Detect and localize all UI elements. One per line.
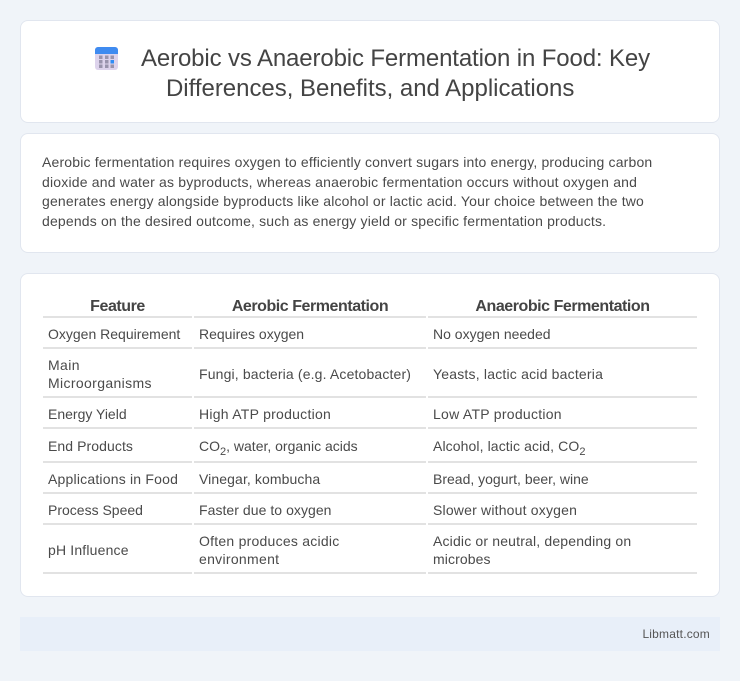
row: microorganisms: Microorganisms — [48, 375, 152, 391]
row: microorganisms: Main — [48, 357, 80, 373]
row: speed: Process Speed — [48, 502, 143, 518]
row: pH: pH Influence — [48, 542, 129, 558]
table: Faster due to oxygen — [199, 502, 332, 518]
table: Alcohol, lactic acid, CO2 — [433, 438, 586, 458]
panel: intro — [20, 133, 720, 253]
title: Aerobic vs Anaerobic Fermentation in Food: Key — [141, 45, 650, 72]
table: High ATP production — [199, 406, 331, 422]
intro text: depends on the desired outcome, such as energy yield or specific fermentation products. — [42, 212, 606, 228]
row: end products: End Products — [48, 438, 133, 454]
panel: comparison table — [20, 273, 720, 597]
row: applications: Applications in Food — [48, 471, 178, 487]
table: environment — [199, 551, 279, 567]
header: aerobic: Aerobic Fermentation — [232, 298, 388, 315]
title: Differences, Benefits, and Applications — [166, 75, 574, 102]
table: CO2, water, organic acids — [199, 438, 358, 458]
table: microbes — [433, 551, 491, 567]
table: Vinegar, kombucha — [199, 471, 320, 487]
table: Bread, yogurt, beer, wine — [433, 471, 589, 487]
table: Fungi, bacteria (e.g. Acetobacter) — [199, 366, 411, 382]
header: feature: Feature — [90, 298, 145, 315]
table: Requires oxygen — [199, 326, 304, 342]
table: No oxygen needed — [433, 326, 551, 342]
table: Yeasts, lactic acid bacteria — [433, 366, 603, 382]
panel: title card — [20, 20, 720, 123]
intro text: dioxide and water as byproducts, whereas anaerobic fermentation occurs without oxygen and — [42, 174, 637, 190]
table: Acidic or neutral, depending on — [433, 533, 631, 549]
title — [141, 45, 650, 102]
row: microorganisms — [48, 357, 152, 391]
intro text: Aerobic fermentation requires oxygen to efficiently convert sugars into energy, producing carbon — [42, 154, 652, 170]
intro text — [42, 154, 652, 229]
row: energy: Energy Yield — [48, 406, 127, 422]
footer text: Libmatt.com — [642, 627, 710, 641]
row: oxygen: Oxygen Requirement — [48, 326, 180, 342]
table: Often produces acidic — [199, 533, 339, 549]
intro text: generates energy alongside byproducts like alcohol or lactic acid. Your choice between the two — [42, 193, 644, 209]
header: anaerobic: Anaerobic Fermentation — [475, 298, 650, 315]
table: Low ATP production — [433, 406, 562, 422]
footer bar — [20, 617, 720, 651]
icon: calendar — [95, 47, 118, 70]
table: Slower without oxygen — [433, 502, 577, 518]
